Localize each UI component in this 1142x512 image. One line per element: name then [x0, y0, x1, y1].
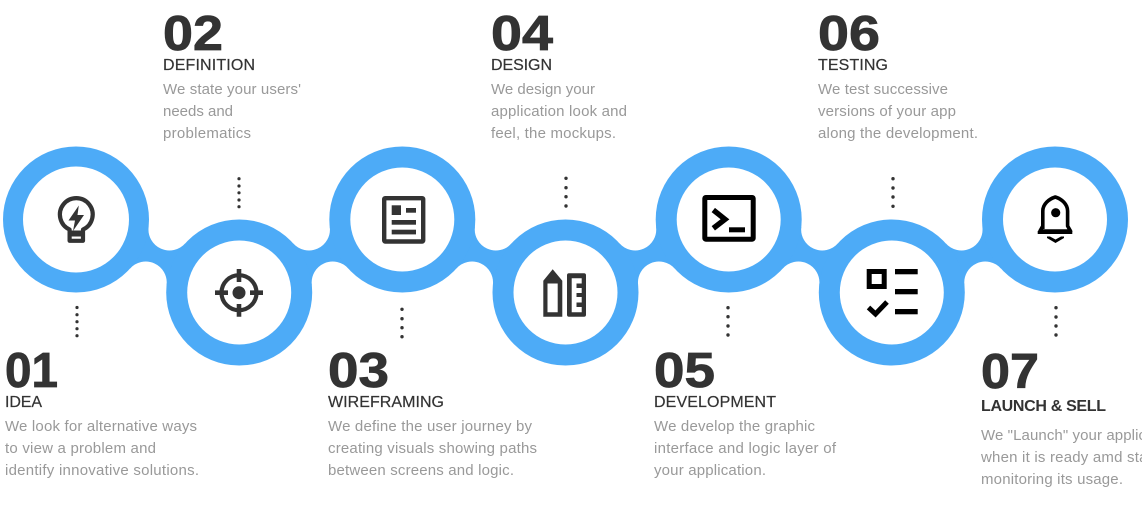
step 03: wireframing: 03	[328, 344, 389, 398]
step 06: testing: TESTING	[818, 57, 888, 74]
step 02: definition: DEFINITION	[163, 57, 255, 74]
step 05: development: 05	[654, 344, 715, 398]
icon: checklist	[868, 269, 918, 314]
step 03: wireframing: between screens and logic.	[328, 462, 514, 479]
step 06: testing: We test successive	[818, 81, 948, 98]
step 01: idea: IDEA	[5, 394, 42, 411]
step 02: definition	[163, 7, 301, 142]
step 07: launch and sell	[980, 345, 1142, 488]
step 05: development	[654, 344, 837, 479]
step 06: testing	[818, 7, 978, 142]
dotted leader 07	[1054, 306, 1058, 337]
step 02: definition: problematics	[163, 125, 251, 142]
icon: target	[215, 269, 263, 317]
step 05: development: interface and logic layer of	[654, 440, 837, 457]
icon: light bulb	[60, 198, 93, 241]
dotted leader 01	[75, 306, 79, 337]
step 01: idea: We look for alternative ways	[5, 418, 197, 435]
step 01: idea: 01	[5, 344, 58, 398]
step 07: launch and sell: LAUNCH & SELL	[981, 398, 1106, 415]
step 03: wireframing: We define the user journey by	[328, 418, 532, 435]
step 01: idea: to view a problem and	[5, 440, 156, 457]
icon: pencil and ruler	[543, 269, 586, 317]
step 07: launch and sell: 07	[981, 345, 1039, 399]
dotted leader 02	[237, 177, 241, 208]
step 02: definition: needs and	[163, 103, 233, 120]
step 06: testing: along the development.	[818, 125, 978, 142]
step 04: design: DESIGN	[491, 57, 552, 74]
step 02: definition: 02	[163, 7, 223, 61]
icon: wireframe article	[384, 198, 423, 242]
step 04: design: application look and	[491, 103, 627, 120]
step 04: design: 04	[491, 7, 553, 61]
step 07: launch and sell: monitoring its usage.	[981, 471, 1123, 488]
step 06: testing: 06	[818, 7, 880, 61]
step 05: development: your application.	[654, 462, 766, 479]
step 06: testing: versions of your app	[818, 103, 956, 120]
step 03: wireframing: WIREFRAMING	[328, 394, 444, 411]
icon: terminal	[705, 198, 753, 239]
step 04: design: We design your	[491, 81, 595, 98]
step 01: idea	[5, 344, 199, 479]
step 04: design	[491, 7, 627, 142]
dotted leader 05	[726, 306, 730, 337]
step 02: definition: We state your users'	[163, 81, 301, 98]
icon: rocket bell	[1038, 197, 1072, 243]
step 05: development: DEVELOPMENT	[654, 394, 776, 411]
step 03: wireframing: creating visuals showing paths	[328, 440, 537, 457]
step 03: wireframing	[328, 344, 537, 479]
step 04: design: feel, the mockups.	[491, 125, 616, 142]
dotted leader 06	[891, 177, 895, 208]
dotted leader 03	[400, 308, 404, 338]
dotted leader 04	[564, 177, 568, 208]
blue ribbon of connected rings	[3, 146, 1128, 366]
step 01: idea: identify innovative solutions.	[5, 462, 199, 479]
step 05: development: We develop the graphic	[654, 418, 816, 435]
